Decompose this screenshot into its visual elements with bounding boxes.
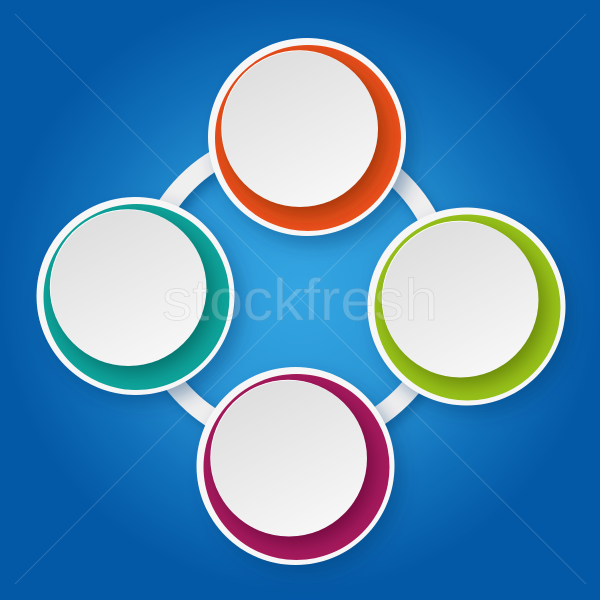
node: right green	[368, 208, 573, 414]
node: left teal	[36, 197, 242, 404]
node: top orange	[208, 38, 414, 245]
connecting ring	[142, 138, 451, 448]
node: bottom magenta	[196, 367, 402, 574]
watermark: stockfresh	[162, 268, 438, 333]
